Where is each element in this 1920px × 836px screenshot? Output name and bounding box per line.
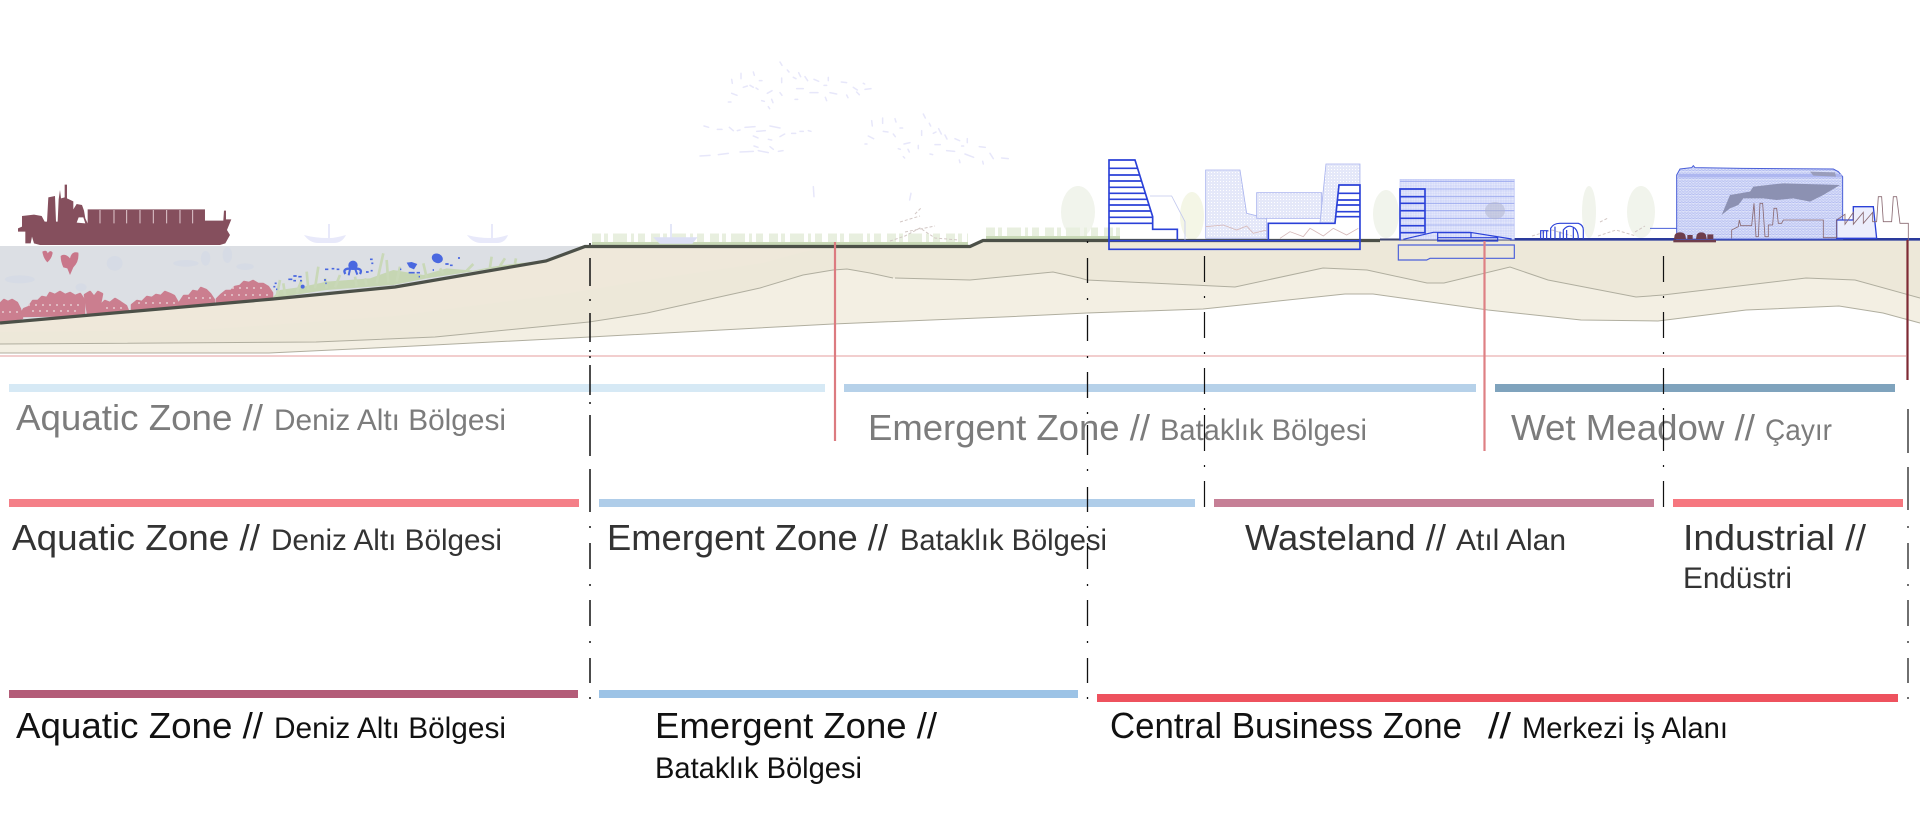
birds flock <box>700 62 1008 200</box>
sea creatures <box>273 252 460 289</box>
chimney outline <box>1732 197 1908 240</box>
blue section buildings <box>1109 160 1360 249</box>
label: aquatic zone, row 2: Deniz Altı Bölgesi <box>271 524 502 557</box>
label: emergent zone, row 2 <box>607 517 1107 558</box>
label: emergent zone, row 1: Emergent Zone // <box>868 407 1150 448</box>
band: aquatic, pink <box>9 499 579 507</box>
octopus <box>344 261 361 275</box>
tower B <box>1268 185 1360 241</box>
band: emergent, blue <box>599 690 1078 698</box>
label: wasteland: Atıl Alan <box>1456 524 1566 557</box>
label: emergent zone, row 3: Emergent Zone // <box>655 705 937 746</box>
label: industrial: Industrial // <box>1683 517 1866 558</box>
bubbles <box>273 258 460 289</box>
label: industrial <box>1683 517 1866 595</box>
label: emergent zone, row 2: Bataklık Bölgesi <box>900 524 1107 557</box>
factory block <box>1837 207 1877 238</box>
soil: top band <box>0 246 833 332</box>
boat 2 <box>467 224 508 243</box>
label: aquatic zone, row 1: Aquatic Zone // <box>16 397 263 438</box>
red vertical marker 2 <box>1483 241 1486 451</box>
arch pavilion <box>1541 223 1583 239</box>
label: emergent zone, row 1 <box>868 407 1367 448</box>
dark red vertical marker <box>1906 240 1909 380</box>
coral speckle <box>2 288 270 312</box>
zone divider 4 <box>1662 256 1664 507</box>
boat 1 <box>304 224 346 243</box>
band: aquatic, light blue <box>9 384 825 392</box>
ground line: thin over right <box>1380 238 1510 240</box>
podium <box>1650 227 1677 230</box>
band: emergent, blue <box>599 499 1195 507</box>
row 2 bands <box>9 499 1903 595</box>
band: wasteland, mauve <box>1214 499 1654 507</box>
tower A <box>1109 160 1177 241</box>
pale background buildings <box>1150 164 1360 240</box>
patterned facade <box>1677 166 1843 239</box>
boats <box>304 224 508 243</box>
faint fish silhouettes <box>5 247 254 291</box>
zone divider 3 <box>1204 256 1206 507</box>
label: aquatic zone, row 2 <box>12 517 502 558</box>
aquatic plants and creatures <box>272 252 537 298</box>
label: central business zone: // <box>1488 705 1511 746</box>
label: aquatic zone, row 1: Deniz Altı Bölgesi <box>274 404 506 437</box>
roof band <box>1678 171 1842 181</box>
label: industrial: Endüstri <box>1683 562 1792 595</box>
label: emergent zone, row 2: Emergent Zone // <box>607 517 888 558</box>
band: industrial, pink <box>1673 499 1903 507</box>
faint trees <box>1061 186 1655 240</box>
label: aquatic zone, row 3: Aquatic Zone // <box>16 705 263 746</box>
label: emergent zone, row 1: Bataklık Bölgesi <box>1160 414 1367 447</box>
zone divider 1 <box>589 243 591 699</box>
coral reef <box>0 281 272 322</box>
label: central business zone: Central Business Zone <box>1110 705 1462 746</box>
blue tower <box>1398 189 1514 260</box>
soil: lower layer <box>0 240 1920 353</box>
underground box <box>1398 245 1514 260</box>
pale tower right <box>1320 164 1360 223</box>
pale tower left <box>1206 170 1267 238</box>
ground line: blue <box>1510 238 1920 241</box>
label: aquatic zone, row 3: Deniz Altı Bölgesi <box>274 712 506 745</box>
grid office building <box>1398 179 1583 260</box>
label: central business zone: Merkezi İş Alanı <box>1522 712 1728 745</box>
label: aquatic zone, row 2: Aquatic Zone // <box>12 517 260 558</box>
label: wasteland <box>1245 517 1566 558</box>
label: central business zone <box>1110 705 1728 746</box>
band: wet meadow, steel <box>1495 384 1895 392</box>
plants <box>272 253 537 298</box>
band: emergent, blue <box>844 384 1476 392</box>
container ship <box>18 185 231 245</box>
label: aquatic zone, row 3 <box>16 705 506 746</box>
label: wet meadow, row 1: Çayır <box>1765 414 1832 447</box>
soil boundary lines <box>0 267 1920 353</box>
small boat on land <box>655 224 696 243</box>
zone divider 2 <box>1086 241 1088 699</box>
industrial building <box>1650 166 1908 242</box>
label: wasteland: Wasteland // <box>1245 517 1446 558</box>
pale outline <box>1150 196 1185 240</box>
label: emergent zone, row 3 <box>655 705 937 785</box>
red horizontal datum <box>0 355 1906 357</box>
label: wet meadow, row 1: Wet Meadow // <box>1511 407 1755 448</box>
water body <box>0 246 590 323</box>
label: emergent zone, row 3: Bataklık Bölgesi <box>655 752 862 785</box>
pale slab <box>1257 193 1322 218</box>
ground line <box>0 240 1380 323</box>
row 1 bands <box>9 384 1895 448</box>
grey shadow <box>1722 183 1840 215</box>
jellyfish <box>430 252 444 265</box>
grass strip <box>592 233 1120 244</box>
red vertical marker 1 <box>834 242 836 441</box>
row 3 bands <box>9 690 1898 785</box>
sea bird <box>407 262 417 269</box>
trams <box>1673 232 1716 242</box>
soil: upper layer <box>0 240 1920 344</box>
band: aquatic, plum <box>9 690 578 698</box>
bridge hump <box>1403 232 1512 241</box>
landscape profile <box>1206 225 1358 238</box>
band: central business, red <box>1097 694 1898 702</box>
zone divider 5 <box>1907 409 1909 699</box>
soil section <box>0 240 1920 353</box>
dotted shrubs <box>890 208 1645 241</box>
pale facade <box>1400 179 1514 239</box>
label: aquatic zone, row 1 <box>16 397 506 438</box>
coral hearts under ship <box>42 251 78 275</box>
basement slab <box>1109 241 1360 249</box>
